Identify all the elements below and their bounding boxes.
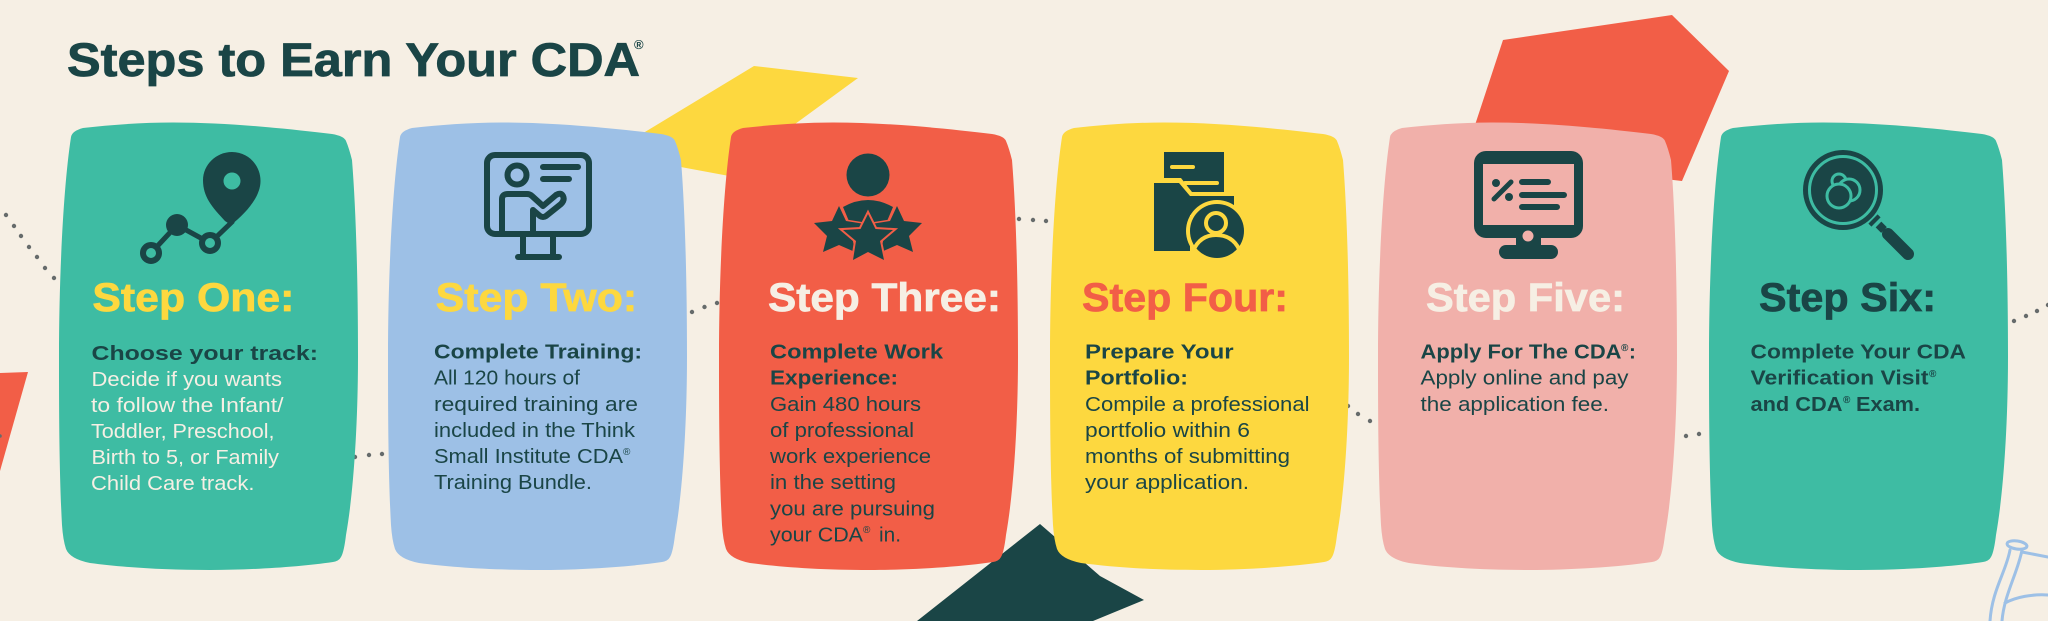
background shape: yellow polygon	[640, 66, 858, 178]
body text: your CDA	[770, 524, 863, 546]
dotted connector path	[0, 213, 2048, 459]
subheading	[1085, 340, 1234, 390]
subheading: Experience:	[770, 367, 898, 390]
body text: the application fee.	[1420, 393, 1609, 416]
title: Steps to Earn Your CDA	[67, 33, 640, 86]
body text: ®	[623, 447, 631, 458]
panel: step five	[1378, 122, 1677, 570]
subheading: Complete Work	[770, 340, 944, 364]
body text	[434, 367, 638, 494]
panel: step six	[1709, 122, 2008, 570]
body text: to follow the Infant/	[91, 394, 284, 417]
step heading: Step One:	[92, 276, 294, 320]
background shape: coral triangle left	[0, 372, 28, 471]
body text: Child Care track.	[91, 472, 254, 495]
bold body text: and CDA	[1750, 393, 1843, 416]
bold body text: Verification Visit	[1750, 367, 1929, 390]
panel: step one	[59, 122, 358, 570]
background shape: dark polygon bottom	[917, 524, 1144, 621]
body text: Decide if you wants	[92, 368, 282, 391]
subheading: Prepare Your	[1085, 340, 1234, 364]
panel: step four	[1050, 122, 1349, 570]
body text: required training are	[434, 393, 638, 416]
body text: Birth to 5, or Family	[92, 446, 280, 469]
body text: in the setting	[770, 471, 896, 494]
subheading: Apply For The CDA	[1420, 340, 1622, 364]
step heading: Step Four:	[1082, 276, 1288, 320]
icon: person with three stars	[814, 154, 922, 260]
bold body text: ®	[1843, 395, 1851, 406]
body text	[1085, 393, 1310, 494]
bold body text	[1750, 340, 1966, 416]
title: ®	[634, 37, 644, 52]
body text: months of submitting	[1085, 445, 1290, 468]
body text: Small Institute CDA	[434, 445, 623, 468]
icon: computer monitor with percent	[1474, 151, 1583, 259]
body text: Training Bundle.	[434, 471, 592, 494]
body text: ®	[863, 525, 871, 536]
subheading: :	[1629, 340, 1636, 364]
step heading: Step Five:	[1426, 276, 1625, 320]
background shape: coral polygon top right	[1475, 15, 1729, 181]
subheading: ®	[1621, 343, 1629, 354]
subheading: Complete Training:	[434, 340, 642, 364]
body text: work experience	[769, 445, 931, 468]
step heading: Step Six:	[1759, 276, 1936, 320]
icon: blue flag sketch	[1990, 540, 2048, 621]
body text	[1420, 367, 1629, 416]
body text: included in the Think	[434, 419, 636, 442]
body text: your application.	[1085, 471, 1249, 494]
icon: route with map pin	[143, 152, 260, 261]
icon: presenter at screen	[487, 155, 589, 257]
body text: Toddler, Preschool,	[91, 420, 274, 443]
body text: portfolio within 6	[1085, 419, 1250, 442]
body text: Gain 480 hours	[770, 393, 921, 416]
body text: All 120 hours of	[434, 367, 580, 390]
body text: in.	[879, 524, 901, 546]
body text	[769, 393, 935, 546]
body text: of professional	[770, 419, 914, 442]
bold body text: ®	[1929, 369, 1937, 380]
body text	[91, 368, 284, 495]
panel: step two	[388, 122, 687, 570]
bold body text: Exam.	[1856, 393, 1920, 416]
body text: you are pursuing	[770, 497, 935, 520]
icon: magnifying glass with bubbles	[1803, 150, 1908, 254]
body text: Compile a professional	[1085, 393, 1310, 416]
step heading: Step Two:	[436, 276, 637, 320]
panel: step three	[719, 122, 1018, 570]
bold body text: Complete Your CDA	[1750, 340, 1966, 364]
subheading	[770, 340, 944, 390]
subheading: Choose your track:	[92, 342, 318, 365]
subheading: Portfolio:	[1085, 367, 1188, 390]
step heading: Step Three:	[768, 276, 1001, 320]
icon: folder with profile	[1154, 152, 1248, 262]
body text: Apply online and pay	[1420, 367, 1629, 390]
